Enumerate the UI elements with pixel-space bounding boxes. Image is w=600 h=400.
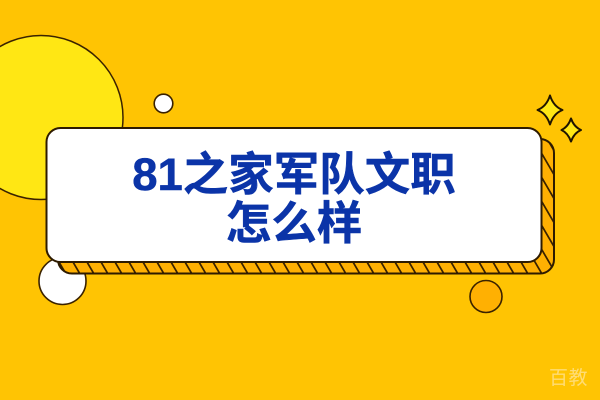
white circle bottom left	[39, 258, 86, 304]
orange circle bottom right	[470, 280, 502, 312]
large yellow circle	[0, 36, 123, 200]
title	[132, 149, 456, 249]
small white circle top	[154, 94, 173, 113]
hatched card shadow	[58, 139, 554, 274]
watermark: 百教	[549, 367, 588, 389]
title: 怎么样	[226, 198, 362, 249]
white title card	[46, 128, 542, 262]
icon: small sparkle	[562, 118, 581, 142]
title: 81之家军队文职	[132, 149, 456, 200]
icon: large sparkle	[538, 96, 562, 124]
